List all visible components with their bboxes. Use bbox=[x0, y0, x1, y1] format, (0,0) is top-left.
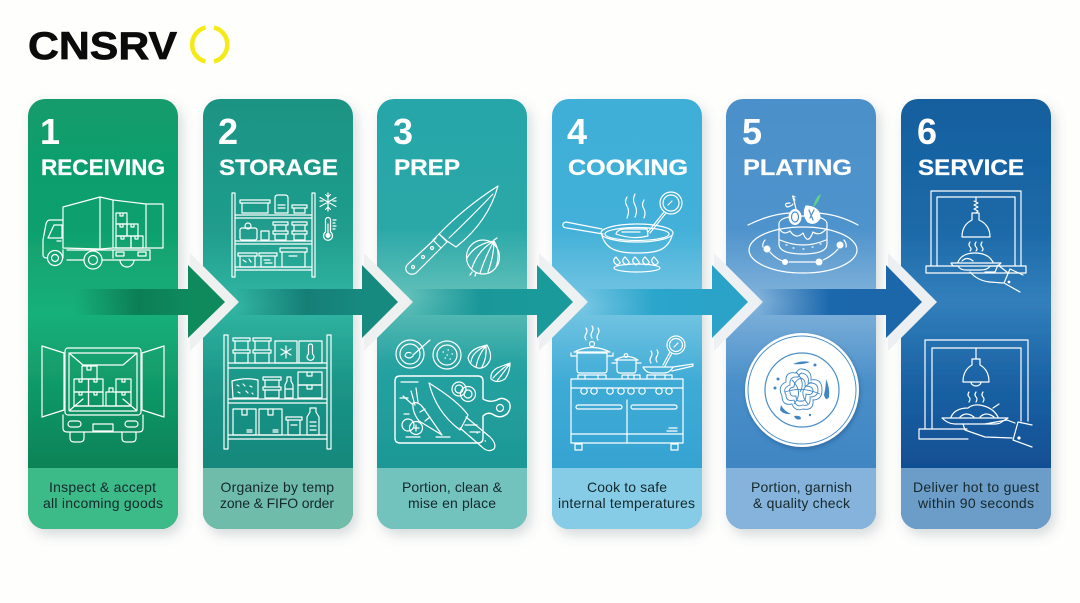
arrow: plating to service bbox=[758, 253, 937, 351]
icon: truck side bbox=[43, 197, 163, 269]
panel: prep bbox=[377, 99, 527, 529]
icon: frying pan on burner bbox=[563, 192, 682, 272]
arrow: receiving to storage bbox=[75, 253, 239, 351]
logo: CNSRV bbox=[28, 25, 227, 68]
logo ring bbox=[192, 28, 227, 62]
icon: prep board bbox=[395, 340, 510, 451]
caption text: & quality check bbox=[753, 495, 851, 511]
caption band bbox=[901, 468, 1051, 529]
caption text: mise en place bbox=[408, 495, 496, 511]
caption text: Cook to safe bbox=[587, 479, 667, 495]
icon: heat lamp pass bbox=[926, 191, 1026, 292]
card background bbox=[552, 99, 702, 529]
card background bbox=[726, 99, 876, 529]
caption text: all incoming goods bbox=[43, 495, 163, 511]
logo wordmark: CNSRV bbox=[28, 25, 177, 68]
caption text bbox=[751, 479, 852, 511]
caption text: within 90 seconds bbox=[917, 495, 1034, 511]
panel: receiving bbox=[28, 99, 178, 529]
heading: PLATING bbox=[743, 155, 852, 180]
caption text: Deliver hot to guest bbox=[913, 479, 1039, 495]
panel: storage bbox=[203, 99, 353, 529]
step number: 6 bbox=[917, 111, 937, 152]
caption band bbox=[726, 468, 876, 529]
caption text: Organize by temp bbox=[220, 479, 334, 495]
caption text bbox=[402, 479, 503, 511]
card background bbox=[377, 99, 527, 529]
caption text: Portion, garnish bbox=[751, 479, 852, 495]
icon: plated dessert bbox=[748, 195, 858, 273]
caption text: Inspect & accept bbox=[49, 479, 156, 495]
caption text bbox=[220, 479, 334, 511]
step number: 2 bbox=[218, 111, 238, 152]
step number: 1 bbox=[40, 111, 60, 152]
arrow: storage to prep bbox=[235, 253, 413, 351]
step number: 5 bbox=[742, 111, 762, 152]
card background bbox=[28, 99, 178, 529]
caption band bbox=[377, 468, 527, 529]
arrow: cooking to plating bbox=[583, 253, 763, 351]
caption text: internal temperatures bbox=[558, 495, 695, 511]
caption text bbox=[558, 479, 695, 511]
heading: COOKING bbox=[568, 155, 688, 180]
caption text: Portion, clean & bbox=[402, 479, 503, 495]
panel: service bbox=[901, 99, 1051, 529]
heading: PREP bbox=[394, 155, 460, 180]
heading: STORAGE bbox=[219, 155, 338, 180]
caption band bbox=[552, 468, 702, 529]
step number: 4 bbox=[567, 111, 587, 152]
icon: storage shelf with containers bbox=[224, 335, 331, 449]
heading: SERVICE bbox=[918, 155, 1024, 180]
caption band bbox=[28, 468, 178, 529]
caption text bbox=[913, 479, 1039, 511]
card background bbox=[203, 99, 353, 529]
icon: truck rear bbox=[42, 346, 164, 442]
caption band bbox=[203, 468, 353, 529]
card background bbox=[901, 99, 1051, 529]
icon: range with pots bbox=[571, 326, 693, 450]
icon: storage shelf with temperature bbox=[232, 193, 336, 277]
panel: plating bbox=[726, 99, 876, 529]
caption text: zone & FIFO order bbox=[220, 495, 334, 511]
icon: chef knife and onion bbox=[406, 186, 500, 276]
icon: plated pasta bbox=[745, 333, 859, 447]
caption text bbox=[43, 479, 163, 511]
arrow: prep to cooking bbox=[408, 253, 588, 351]
step number: 3 bbox=[393, 111, 413, 152]
icon: plate under heat lamp bbox=[919, 340, 1032, 447]
panel: cooking bbox=[552, 99, 702, 529]
heading: RECEIVING bbox=[41, 155, 165, 180]
